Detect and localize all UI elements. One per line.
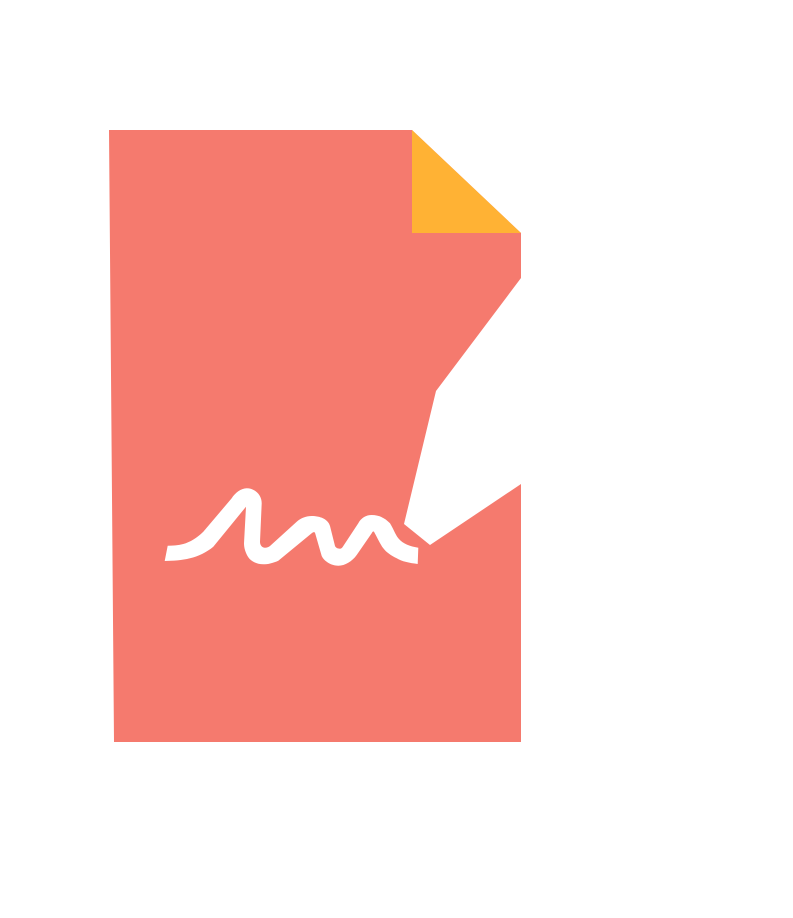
signature squiggle bbox=[165, 488, 418, 566]
folded corner bbox=[412, 130, 521, 233]
document page bbox=[109, 130, 521, 742]
